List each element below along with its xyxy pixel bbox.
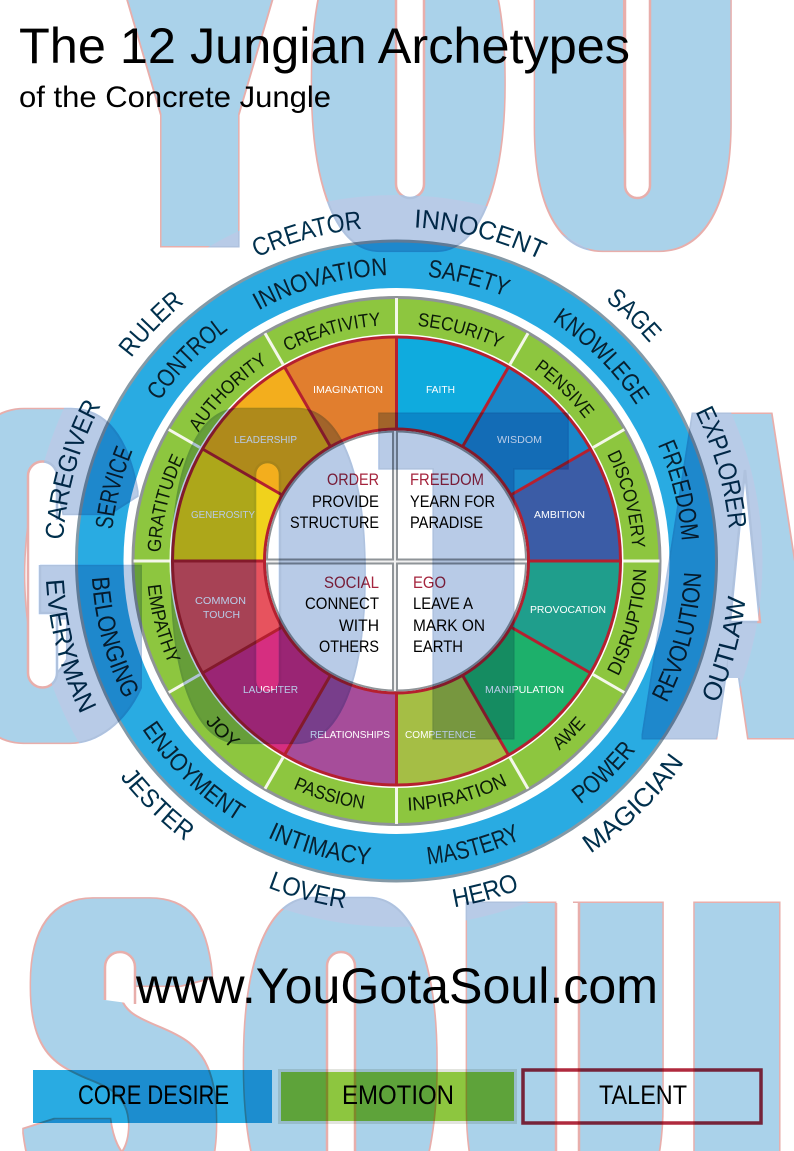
label: FAITH: FAITH (426, 384, 455, 396)
text block: order: ORDER (327, 471, 379, 489)
text block: order: STRUCTURE (290, 514, 379, 532)
label: AUTHORITY: AUTHORITY (190, 352, 264, 432)
text block: freedom: PARADISE (410, 514, 483, 532)
label: DISRUPTION: DISRUPTION (607, 570, 646, 676)
text block: social: OTHERS (319, 638, 379, 656)
text block: ego: MARK ON (413, 617, 485, 635)
label: INNOVATION: INNOVATION (252, 258, 386, 310)
label: INNOCENT: INNOCENT (416, 210, 548, 257)
website url: www.YouGotaSoul.com (135, 958, 658, 1014)
label: COMMON TOUCH: COMMON (195, 595, 246, 607)
text block: social: SOCIAL (324, 574, 379, 592)
label: AWE: AWE (554, 716, 586, 751)
text block: social (305, 574, 379, 656)
watermark: SOUL (44, 802, 794, 1151)
title: The 12 Jungian Archetypes (19, 18, 630, 74)
label: EVERYMAN: EVERYMAN (46, 580, 96, 713)
label: MANIPULATION: MANIPULATION (485, 684, 564, 696)
text block: order: PROVIDE (312, 493, 379, 511)
label: INPIRATION: INPIRATION (408, 774, 506, 811)
label: PROVOCATION: PROVOCATION (530, 604, 606, 616)
label: LOVER: LOVER (270, 872, 346, 908)
label: EMPATHY: EMPATHY (148, 584, 181, 660)
label: RULER: RULER (111, 283, 190, 364)
label: HERO: HERO (452, 875, 516, 907)
legend (33, 1070, 761, 1123)
legend: emotion (280, 1070, 516, 1122)
label: KNOWLEGE: KNOWLEGE (554, 308, 650, 404)
label: GRATITUDE: GRATITUDE (148, 454, 184, 552)
watermark: GOTA: T (399, 314, 548, 837)
label: PENSIVE: PENSIVE (535, 359, 595, 418)
text block: ego: EARTH (413, 638, 463, 656)
label: COMPETENCE: COMPETENCE (405, 729, 476, 741)
label: LEADERSHIP: LEADERSHIP (234, 434, 297, 446)
label: REVOLUTION: REVOLUTION (652, 574, 702, 702)
label: WISDOM: WISDOM (497, 434, 542, 446)
label: MAGICIAN: MAGICIAN (582, 753, 683, 852)
text block: ego (413, 574, 485, 656)
text block: order (290, 471, 379, 532)
label: COMMON TOUCH: TOUCH (203, 609, 240, 621)
label: ENJOYMENT: ENJOYMENT (143, 720, 246, 818)
text block: freedom (410, 471, 495, 532)
legend: emotion: EMOTION (342, 1080, 454, 1110)
archetype names around the wheel (32, 197, 759, 916)
label: CONTROL: CONTROL (148, 320, 228, 398)
label: SAGE: SAGE (608, 289, 662, 342)
legend: talent (523, 1070, 761, 1123)
label: CAREGIVER: CAREGIVER (46, 400, 100, 538)
label: IMAGINATION: IMAGINATION (313, 384, 383, 396)
label: JOY: JOY (206, 716, 241, 746)
subtitle: of the Concrete Jungle (19, 81, 331, 114)
label: OUTLAW: OUTLAW (704, 596, 745, 700)
lavender halo behind wheel (30, 195, 762, 927)
label: COMMON TOUCH (195, 595, 246, 621)
legend: talent: TALENT (599, 1080, 687, 1110)
text block: freedom: YEARN FOR (410, 493, 495, 511)
text block: social: CONNECT (305, 595, 379, 613)
text block: social: WITH (339, 617, 379, 635)
legend: core desire: CORE DESIRE (78, 1080, 229, 1110)
panel: central hub (264, 429, 528, 693)
panel: talent wheel (153, 317, 640, 805)
watermark: GOTA: O (191, 314, 346, 837)
watermark: GOTA (0, 314, 794, 837)
label: LAUGHTER: LAUGHTER (243, 684, 298, 696)
label: PASSION: PASSION (294, 777, 364, 809)
text block: freedom: FREEDOM (410, 471, 484, 489)
text block: ego: LEAVE A (413, 595, 473, 613)
label: JESTER: JESTER (122, 770, 193, 841)
label: INTIMACY: INTIMACY (269, 822, 372, 864)
label: GENEROSITY: GENEROSITY (191, 509, 255, 521)
label: FREEDOM: FREEDOM (658, 440, 699, 540)
label: CREATOR: CREATOR (246, 200, 367, 264)
label: EXPLORER: EXPLORER (696, 406, 746, 528)
panel: core desire ring (76, 241, 716, 881)
legend: core desire (33, 1070, 272, 1123)
label: BELONGING: BELONGING (92, 578, 138, 696)
label: POWER: POWER (571, 742, 636, 804)
label: SECURITY: SECURITY (418, 313, 505, 347)
label: AMBITION: AMBITION (534, 509, 585, 521)
label: DISCOVERY: DISCOVERY (608, 450, 646, 547)
watermark: YOU (124, 0, 718, 345)
label: SERVICE: SERVICE (96, 445, 132, 528)
text block: ego: EGO (413, 574, 446, 592)
label: SAFETY: SAFETY (428, 260, 512, 294)
panel: emotion ring (133, 298, 660, 824)
label: CREATIVITY: CREATIVITY (284, 312, 380, 350)
label: MASTERY: MASTERY (427, 824, 516, 864)
label: RELATIONSHIPS: RELATIONSHIPS (310, 729, 390, 741)
